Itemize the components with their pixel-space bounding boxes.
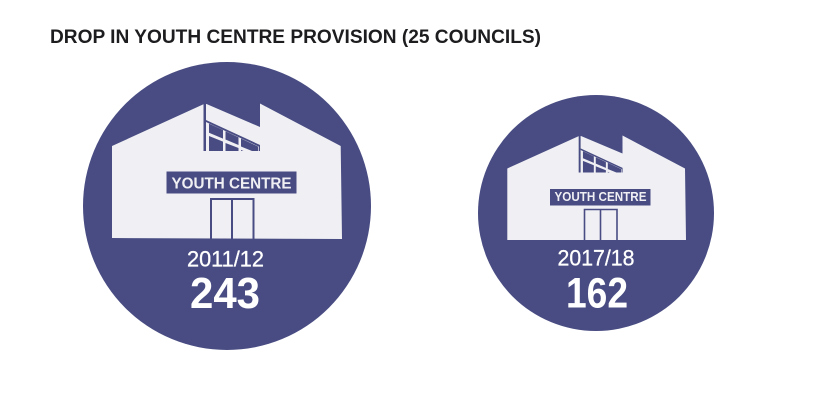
title: DROP IN YOUTH CENTRE PROVISION (25 COUNCILS) bbox=[50, 26, 541, 48]
sign: YOUTH CENTRE bbox=[554, 189, 647, 204]
door bbox=[211, 199, 254, 239]
icon: youth centre building bbox=[507, 136, 686, 240]
circle background bbox=[478, 95, 714, 331]
value: 162 bbox=[566, 270, 628, 318]
panel: 2017/18 badge bbox=[478, 95, 714, 331]
year label: 2017/18 bbox=[558, 246, 634, 271]
value: 243 bbox=[190, 269, 260, 318]
year label: 2011/12 bbox=[187, 246, 264, 272]
icon: youth centre building bbox=[112, 104, 342, 239]
panel: 2011/12 badge bbox=[83, 62, 371, 350]
sign: YOUTH CENTRE bbox=[172, 175, 292, 192]
door bbox=[584, 210, 617, 240]
circle background bbox=[83, 62, 371, 350]
